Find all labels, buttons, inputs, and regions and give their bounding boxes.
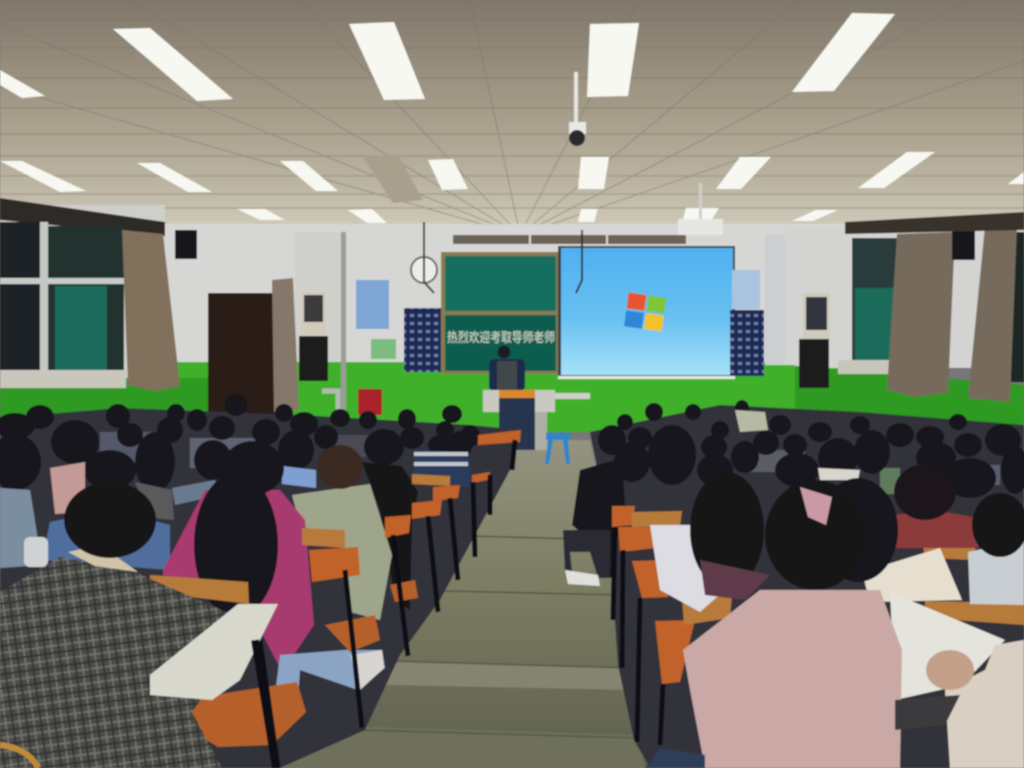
- right wall poster: [732, 270, 760, 309]
- desk under book: [895, 695, 960, 730]
- blue stool: [545, 433, 570, 464]
- right seating block: [563, 400, 1024, 768]
- back wall: [160, 224, 860, 432]
- front desk leg: [255, 640, 276, 768]
- cream sweater student: [818, 478, 962, 602]
- magenta jacket student: [163, 441, 385, 698]
- corner chair: [0, 745, 38, 768]
- jeans at front edge: [645, 748, 705, 768]
- lecturer: [489, 346, 525, 391]
- desk legs right: [613, 527, 663, 745]
- left chair seats: [150, 580, 418, 747]
- wall clock: [411, 222, 437, 293]
- green wall sign: [371, 339, 396, 359]
- open notebook on front desk: [150, 604, 278, 700]
- pink sweater student: [683, 480, 902, 768]
- right window: [838, 238, 905, 374]
- black display board left: [299, 336, 328, 381]
- hanging microphone: [576, 230, 582, 293]
- person in black patterned jacket: [563, 425, 626, 586]
- door curtain: [272, 278, 299, 412]
- left seating block: [0, 394, 522, 768]
- white jacket student with long hair: [650, 472, 770, 612]
- portrait right: [803, 293, 830, 340]
- back row heads right: [614, 400, 1024, 498]
- left curtain: [122, 230, 180, 391]
- blackboard greeting: 热烈欢迎考取导师老师: [447, 330, 555, 345]
- windows logo: [624, 293, 666, 331]
- gray hoodie student: [968, 493, 1024, 605]
- projector: [678, 183, 723, 235]
- back row heads left: [0, 394, 480, 492]
- left desks: [309, 430, 521, 582]
- ceiling: [0, 0, 1024, 235]
- light sweater in back row: [735, 410, 768, 432]
- black sweater student: [362, 429, 418, 610]
- right wall: [765, 228, 1024, 432]
- green jacket student: [292, 445, 392, 620]
- left chair backs: [150, 474, 450, 604]
- projection screen: [558, 246, 735, 379]
- back row clothing patches right: [745, 450, 1000, 494]
- desk legs left: [260, 440, 515, 768]
- open book: [890, 592, 1005, 700]
- blue notice poster: [356, 280, 389, 329]
- wall pipe left: [322, 391, 338, 416]
- ceiling lights: [0, 13, 1024, 223]
- floor aisle: [260, 440, 660, 768]
- door: [208, 293, 275, 415]
- podium: [483, 390, 590, 450]
- tile board left: [404, 308, 441, 372]
- right curtains: [887, 226, 1024, 402]
- left wall with windows: [0, 198, 210, 428]
- beam above screen: [453, 235, 686, 244]
- blackboard: [441, 252, 560, 374]
- security camera: [569, 72, 586, 146]
- red fire box: [358, 389, 382, 415]
- wall band above right side: [845, 212, 1024, 234]
- red jacket student: [893, 464, 978, 548]
- right speaker: [952, 228, 975, 260]
- right desks: [612, 506, 695, 684]
- back row clothing patches: [100, 432, 400, 468]
- tile board right: [730, 310, 764, 376]
- right chair backs: [632, 511, 1024, 625]
- left row students: [0, 488, 42, 568]
- portrait left: [301, 292, 326, 335]
- plaid jacket student: [0, 482, 244, 768]
- left speaker: [175, 230, 197, 259]
- corner student in white knit: [926, 640, 1024, 768]
- black display board right: [799, 339, 829, 388]
